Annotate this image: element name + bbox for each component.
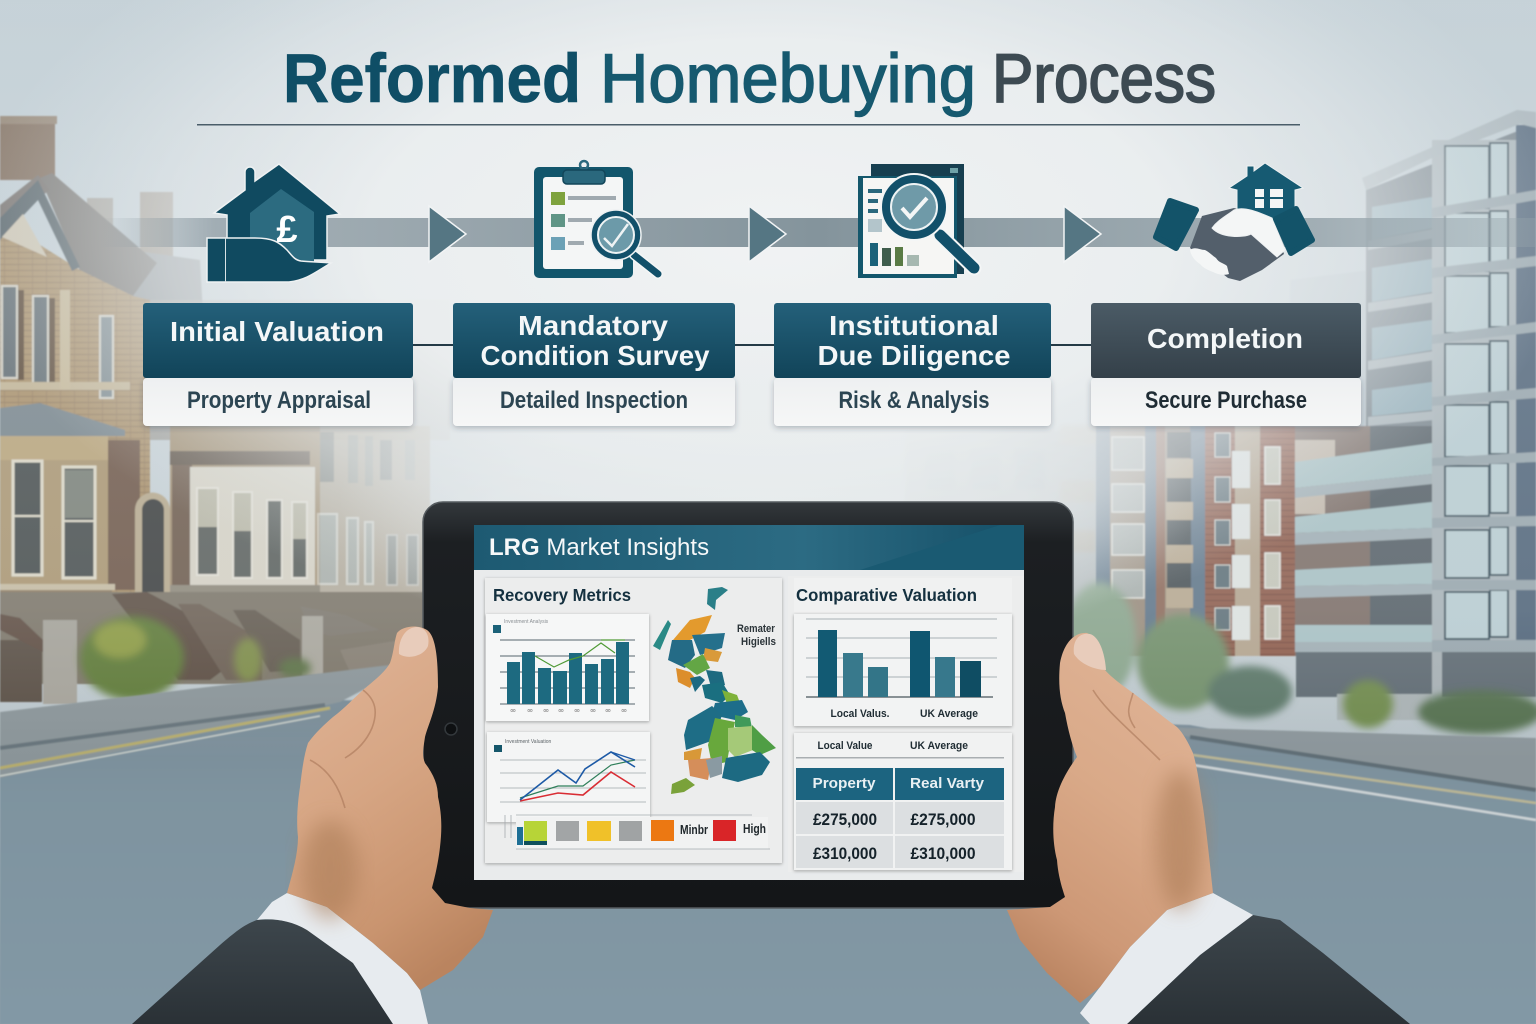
step 2: Mandatory Condition Survey [453, 303, 735, 426]
gable [0, 180, 80, 271]
right shirt cuff [1080, 893, 1253, 1024]
data table: £310,000 [813, 844, 877, 863]
icon: house with pound in hand [207, 164, 340, 282]
title word: Reformed: Reformed [283, 40, 581, 117]
main roof [40, 173, 157, 296]
bar chart: UK Average [920, 708, 978, 720]
fog overlays [0, 0, 1536, 760]
arrow 2 [749, 206, 786, 262]
left hand [287, 626, 493, 990]
panel: comparative valuation [788, 576, 1024, 872]
icon: house with pound in hand: £ [276, 209, 298, 251]
arched door [135, 492, 170, 592]
bar chart: Investment Analysis [504, 619, 549, 625]
faint tower wing behind labels [1290, 270, 1370, 450]
pavement and road [0, 665, 1536, 1024]
bay roof [0, 403, 125, 436]
bar chart [486, 614, 649, 721]
bar chart: Local Valus. [830, 708, 890, 720]
bar chart: 00 [574, 708, 580, 713]
far buildings centre-right [905, 425, 1100, 620]
tablet [423, 502, 1073, 908]
bar chart: 00 [590, 708, 596, 713]
process flow band [100, 218, 1536, 247]
data table: £275,000 [910, 810, 976, 829]
bar chart: 00 [621, 708, 627, 713]
step 2: Mandatory Condition Survey: Condition Survey [480, 340, 710, 371]
step 3: Institutional Due Diligence: Risk & Analysis [838, 387, 990, 414]
tablet bezel [423, 502, 1073, 908]
screen header [474, 525, 1024, 570]
data table: Property [812, 775, 876, 792]
entrance steps [0, 592, 430, 684]
arms and cuffs [132, 893, 1410, 1024]
second house [170, 426, 320, 591]
data table [794, 733, 1012, 870]
right hand [1007, 633, 1213, 1003]
step 1: Initial Valuation: Property Appraisal [187, 387, 371, 414]
tower windows [1445, 143, 1508, 639]
line chart: Investment Valuation [505, 739, 552, 745]
chimney [0, 116, 55, 180]
panel: recovery metrics [485, 578, 782, 863]
data table: Local Value [818, 740, 872, 752]
tower main [1366, 124, 1536, 700]
step 2: Mandatory Condition Survey: Detailed Inspection [500, 387, 688, 414]
facade [0, 220, 150, 600]
step 1: Initial Valuation: Initial Valuation [170, 316, 384, 347]
bar chart: 00 [605, 708, 611, 713]
bay windows [13, 461, 42, 575]
legend [505, 815, 770, 849]
third and fourth houses, fading [318, 426, 430, 596]
map note: Higiells [741, 636, 776, 648]
lower wide balcony block [1295, 426, 1432, 656]
map of the UK [653, 587, 776, 794]
connector 1 [412, 344, 454, 346]
left shirt cuff [257, 893, 428, 1024]
icon: clipboard with magnifier [534, 161, 658, 278]
bar chart: 00 [558, 708, 564, 713]
data table: UK Average [910, 740, 968, 752]
bar chart: 00 [527, 708, 533, 713]
trees right [1064, 582, 1536, 734]
step 4: Completion [1091, 303, 1361, 426]
ground floor [1296, 652, 1536, 697]
bar chart: 00 [510, 708, 516, 713]
thumbnail [399, 627, 428, 657]
data table: Real Varty [910, 775, 985, 792]
right suit sleeve [1127, 915, 1410, 1024]
screen [474, 525, 1024, 880]
rear chimneys and roofs [87, 198, 113, 228]
left suit sleeve [132, 919, 393, 1024]
step 3: Institutional Due Diligence: Due Diligence [818, 340, 1010, 371]
map note: Remater [737, 623, 776, 635]
legend: Minbr [680, 822, 708, 837]
step 3: Institutional Due Diligence [774, 303, 1051, 426]
line chart [487, 732, 650, 822]
step 3: Institutional Due Diligence: Institutional [829, 310, 999, 341]
icon: documents with magnifier [858, 164, 974, 278]
title word: Process: Process [992, 40, 1216, 117]
apartment blocks right [1096, 110, 1536, 720]
step 4: Completion: Completion [1147, 323, 1303, 354]
step 1: Initial Valuation [143, 303, 413, 426]
arrow 1 [429, 206, 466, 262]
screen header: LRG Market Insights [489, 534, 709, 561]
wrist shading [302, 820, 358, 920]
upper windows [2, 286, 17, 378]
icon: handshake with house [1156, 163, 1312, 281]
terraced houses left [0, 116, 450, 704]
thumbnail [1074, 634, 1106, 670]
data table: £310,000 [910, 844, 976, 863]
panel: recovery metrics: Recovery Metrics [493, 585, 631, 605]
arrow 3 [1064, 206, 1101, 262]
bay stone band [0, 436, 108, 460]
legend: High [743, 821, 766, 836]
bar chart: 00 [543, 708, 549, 713]
upper balconies [1372, 197, 1432, 416]
wrist shading [1156, 770, 1204, 910]
shrubs left [80, 616, 311, 700]
mid brick block [1096, 426, 1296, 656]
data table: £275,000 [813, 810, 877, 829]
title [283, 40, 1216, 117]
connector 2 [734, 344, 775, 346]
panel: comparative valuation: Comparative Valuation [796, 585, 977, 605]
step 2: Mandatory Condition Survey: Mandatory [518, 310, 668, 341]
bar chart [794, 614, 1012, 726]
title word: Homebuying: Homebuying [600, 40, 976, 117]
step 4: Completion: Secure Purchase [1145, 387, 1307, 414]
connector 3 [1050, 344, 1092, 346]
tower floor slabs [1432, 190, 1536, 652]
